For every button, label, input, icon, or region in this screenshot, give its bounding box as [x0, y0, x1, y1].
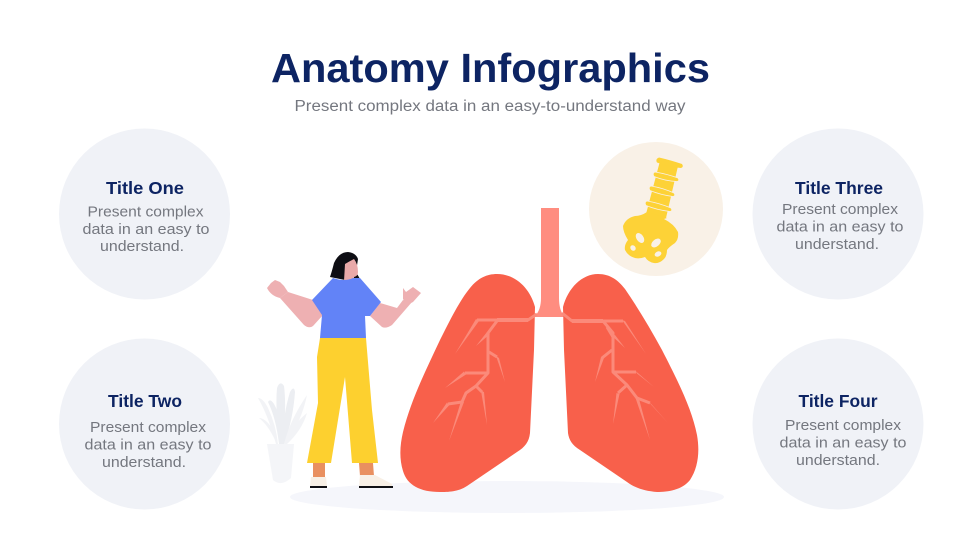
left bronchi tips — [433, 319, 505, 441]
panel: title two — [59, 338, 230, 510]
spine plates — [656, 158, 683, 168]
hair — [330, 252, 360, 280]
trachea — [535, 208, 564, 317]
right bronchi — [562, 313, 650, 403]
right bronchi tips — [595, 320, 668, 440]
right hand — [403, 287, 421, 305]
left bronchi — [448, 314, 537, 404]
right arm — [370, 300, 412, 328]
panel: title three: data in an easy to — [776, 220, 904, 236]
title: Anatomy Infographics — [271, 45, 710, 91]
icon: plant — [258, 383, 307, 483]
spine column — [646, 161, 678, 218]
shirt — [312, 278, 381, 338]
left lung — [400, 274, 535, 492]
subtitle: Present complex data in an easy-to-understand way — [294, 98, 686, 115]
panel: title two: Title Two — [108, 391, 182, 411]
figure: woman — [267, 252, 421, 488]
panel: title four — [752, 338, 924, 510]
panel: title one: data in an easy to — [82, 222, 210, 238]
panel: title two: understand. — [102, 455, 186, 471]
face and neck — [344, 259, 358, 281]
panel: title three — [752, 128, 924, 300]
panel: title three: Present complex — [782, 202, 899, 218]
panel: title four: data in an easy to — [780, 436, 906, 452]
panel: title three: understand. — [795, 237, 879, 253]
panel: title two: data in an easy to — [84, 438, 212, 454]
panel: title one: Title One — [106, 178, 184, 198]
panel: title one: Present complex — [88, 204, 204, 220]
panel: title one: understand. — [100, 239, 184, 255]
pants — [307, 338, 378, 463]
panel: title four: understand. — [796, 453, 880, 469]
legs — [313, 463, 374, 477]
right shoe — [359, 475, 392, 486]
panel: title four: Title Four — [798, 391, 878, 411]
icon: bone circle — [589, 142, 723, 276]
left shoe — [310, 477, 327, 486]
left arm — [280, 292, 323, 327]
pelvis holes — [629, 231, 662, 258]
panel: title one — [59, 128, 230, 300]
floor shadow — [290, 481, 724, 513]
panel: title two: Present complex — [90, 420, 207, 436]
pelvis — [623, 212, 678, 263]
right lung — [563, 274, 698, 492]
panel: title four: Present complex — [785, 418, 902, 434]
panel: title three: Title Three — [795, 178, 883, 198]
left hand — [267, 280, 288, 298]
lungs — [400, 208, 698, 492]
